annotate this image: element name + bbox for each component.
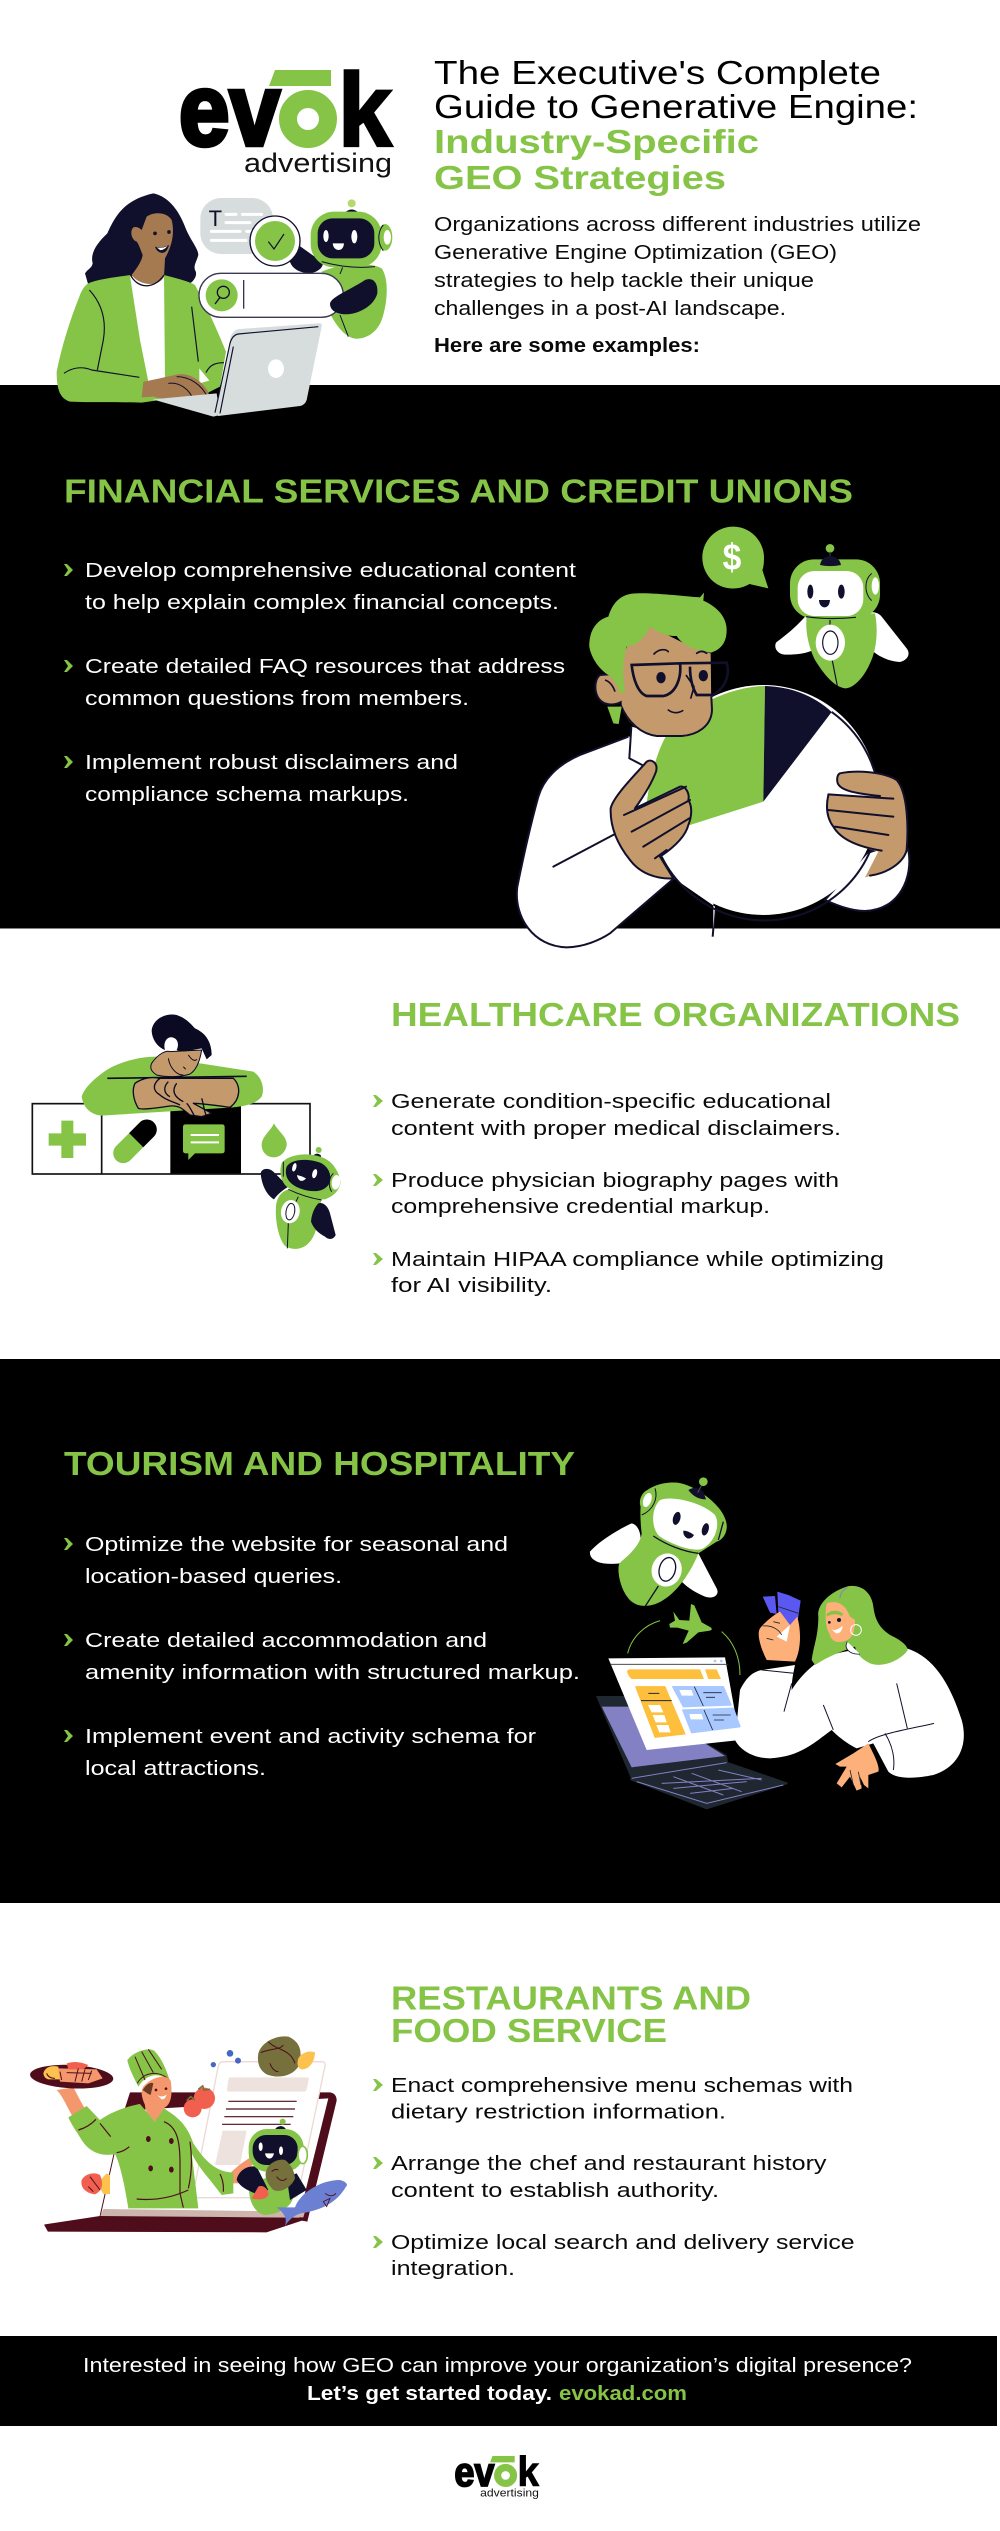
footer logo	[454, 2449, 539, 2499]
illustration: woman with tickets, laptop, plane and robot	[590, 1477, 964, 1808]
bullet: chef history: Arrange the chef and restaurant history	[391, 2153, 826, 2175]
title: Industry-Specific	[434, 123, 759, 160]
illustration: woman leaning on medical icon boxes with robot	[32, 1014, 341, 1249]
lead-in text: Here are some examples:	[434, 335, 700, 357]
illustration: man holding pie chart with robot: $	[723, 535, 742, 577]
bullet: condition content: Generate condition-specific educational	[391, 1091, 831, 1113]
bullet: seasonal queries: Optimize the website for seasonal and	[85, 1533, 508, 1556]
bullet: accommodation	[64, 1629, 580, 1684]
logo: evok advertising: advertising	[244, 148, 392, 178]
bullet: event schema: Implement event and activity schema for	[85, 1725, 536, 1748]
bullet: FAQ resources: Create detailed FAQ resources that address	[85, 655, 565, 678]
bullet: physician biography	[373, 1170, 839, 1218]
illustration: woman at laptop with robot	[57, 193, 392, 417]
header	[57, 53, 921, 417]
heading: tourism: TOURISM AND HOSPITALITY	[64, 1445, 575, 1482]
intro paragraph: Organizations across different industries utilize	[434, 214, 921, 236]
bullet: menu schemas: dietary restriction information.	[391, 2102, 726, 2124]
footer logo: advertising	[480, 2487, 539, 2499]
footer logo: k	[517, 2449, 539, 2495]
bullet: local search: integration.	[391, 2258, 515, 2280]
title: The Executive's Complete	[434, 54, 881, 91]
bullet: chef history: content to establish authority.	[391, 2180, 719, 2202]
cta action	[307, 2382, 687, 2405]
cta action: evokad.com	[559, 2382, 687, 2405]
title: GEO Strategies	[434, 159, 726, 196]
bullet: accommodation: Create detailed accommodation and	[85, 1629, 487, 1652]
bullet: menu schemas	[373, 2075, 853, 2124]
intro paragraph	[434, 214, 921, 320]
heading: financial services: FINANCIAL SERVICES AND CREDIT UNIONS	[64, 472, 853, 510]
bullet: HIPAA: Maintain HIPAA compliance while optimizing	[391, 1249, 884, 1271]
illustration: woman at laptop with robot: T	[209, 206, 222, 231]
bullet: event schema: local attractions.	[85, 1757, 266, 1780]
title	[434, 54, 918, 196]
bullet: accommodation: amenity information with structured markup.	[85, 1661, 580, 1684]
logo: evok advertising: ev	[179, 53, 280, 167]
bullet: local search: Optimize local search and delivery service	[391, 2232, 855, 2254]
bullet: seasonal queries	[64, 1533, 508, 1588]
heading: restaurants	[391, 1980, 751, 2049]
bullet: condition content	[373, 1091, 841, 1140]
panel: healthcare organizations	[32, 996, 960, 1297]
intro paragraph: strategies to help tackle their unique	[434, 270, 814, 292]
bullet: physician biography: Produce physician biography pages with	[391, 1170, 839, 1192]
bullet: condition content: content with proper medical disclaimers.	[391, 1118, 841, 1140]
background band: financial services	[0, 385, 1000, 928]
footer logo: ev	[454, 2449, 495, 2495]
bullet: educational content: Develop comprehensive educational content	[85, 559, 576, 582]
bullet: physician biography: comprehensive credential markup.	[391, 1196, 770, 1218]
panel: financial services	[64, 472, 909, 947]
bullet: menu schemas: Enact comprehensive menu schemas with	[391, 2075, 853, 2097]
background band	[0, 1359, 1000, 1903]
bullet: disclaimers: compliance schema markups.	[85, 783, 409, 806]
call to action banner	[0, 2336, 997, 2426]
intro paragraph: Generative Engine Optimization (GEO)	[434, 242, 837, 264]
bullet: disclaimers: Implement robust disclaimers and	[85, 751, 458, 774]
illustration: man holding pie chart with robot	[517, 527, 909, 947]
logo: evok advertising: k	[338, 53, 392, 169]
cta question: Interested in seeing how GEO can improve your organization’s digital presence?	[83, 2354, 912, 2377]
icon: waving robot	[261, 1147, 341, 1249]
bullet: HIPAA: for AI visibility.	[391, 1275, 552, 1297]
bullet: seasonal queries: location-based queries.	[85, 1565, 342, 1588]
bullet: FAQ resources: common questions from members.	[85, 687, 469, 710]
bullet: disclaimers	[64, 751, 458, 806]
bullet: educational content	[64, 559, 576, 614]
bullet: HIPAA	[373, 1249, 884, 1297]
logo: evok advertising	[179, 53, 392, 178]
cta action: Let’s get started today.	[307, 2382, 552, 2405]
heading: restaurants: RESTAURANTS AND	[391, 1980, 751, 2016]
panel: tourism and hospitality	[0, 1359, 1000, 1903]
bullet: event schema	[64, 1725, 536, 1780]
bullet: local search	[373, 2232, 855, 2280]
title: Guide to Generative Engine:	[434, 88, 918, 125]
intro paragraph: challenges in a post-AI landscape.	[434, 298, 786, 320]
panel: restaurants and food service	[29, 1980, 855, 2280]
heading: healthcare: HEALTHCARE ORGANIZATIONS	[391, 996, 960, 1033]
bullet: chef history	[373, 2153, 826, 2202]
heading: restaurants: FOOD SERVICE	[391, 2012, 667, 2049]
bullet: educational content: to help explain complex financial concepts.	[85, 591, 559, 614]
bullet: FAQ resources	[64, 655, 565, 710]
illustration: chef emerging from laptop with robot	[29, 2036, 347, 2232]
